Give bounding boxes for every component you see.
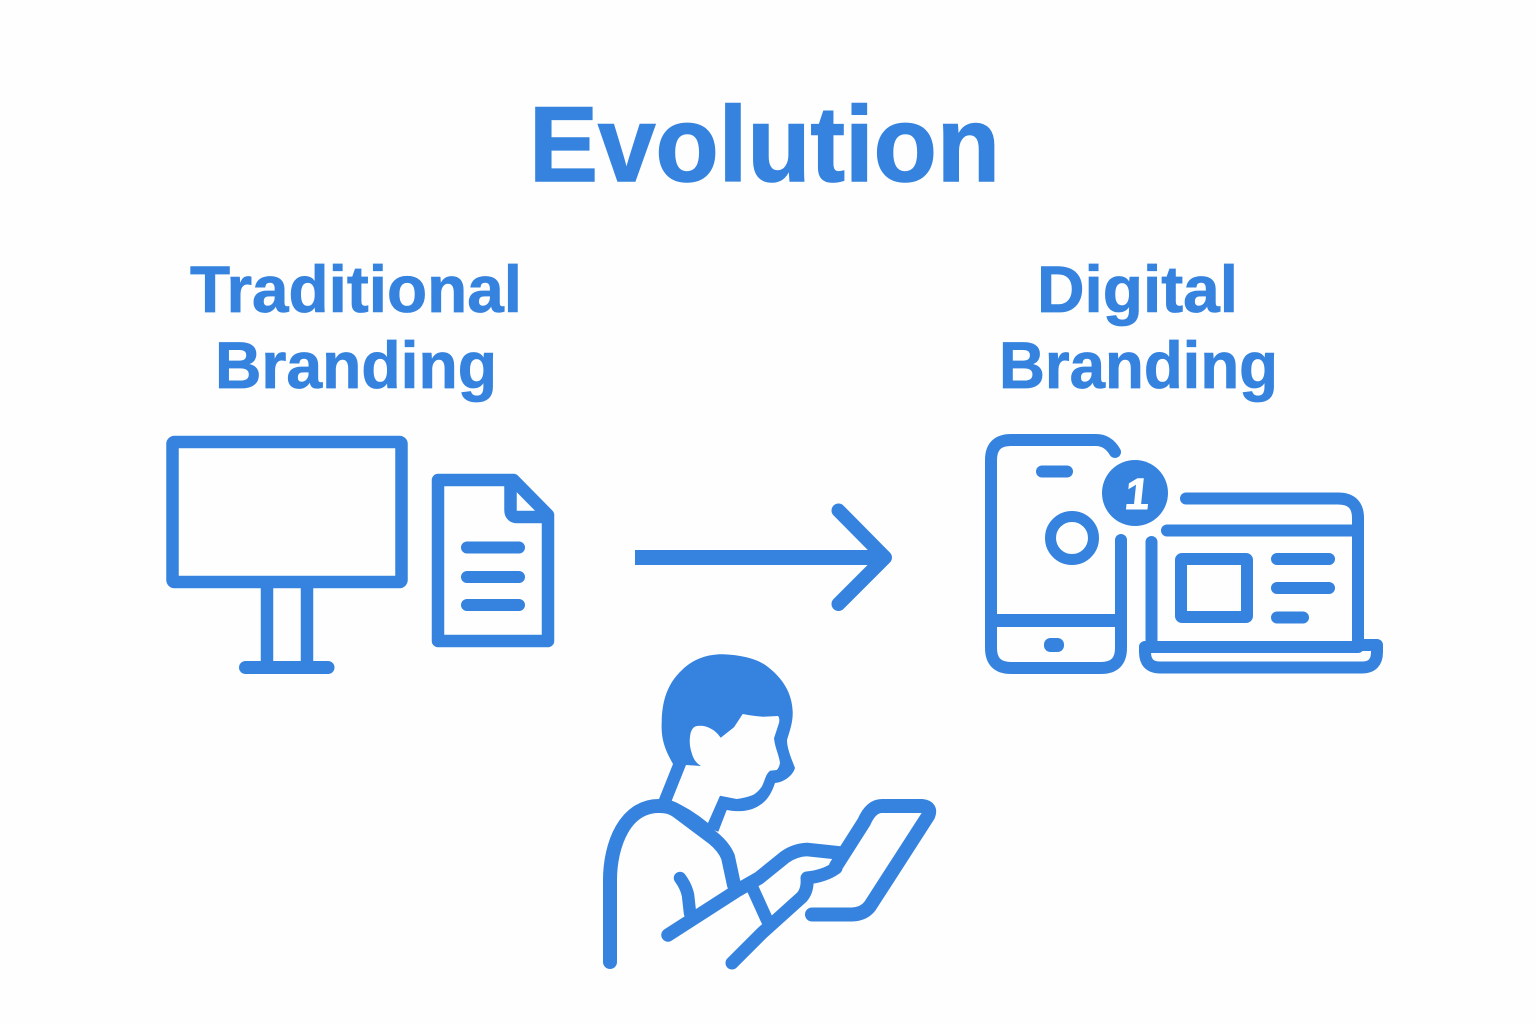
arrow <box>635 510 885 604</box>
sleeve <box>752 887 767 920</box>
icon: laptop <box>1145 498 1377 668</box>
heading: digital branding: Digital <box>1037 252 1238 326</box>
icon: monitor <box>172 442 402 668</box>
head and neck <box>659 654 795 832</box>
notification badge: 1 <box>1123 470 1152 519</box>
hand and fingers <box>732 868 836 963</box>
heading: traditional branding: Branding <box>215 328 497 402</box>
heading: digital branding: Branding <box>999 328 1278 402</box>
heading: digital branding <box>999 252 1278 402</box>
icon: person using tablet <box>610 654 929 963</box>
icon: document <box>438 480 548 641</box>
inner arm <box>668 850 840 935</box>
tablet outline <box>812 806 929 914</box>
heading: traditional branding <box>190 252 522 402</box>
heading: traditional branding: Traditional <box>190 252 522 326</box>
shoulder and back <box>610 806 734 962</box>
notification badge <box>1102 460 1168 526</box>
face cutout <box>672 714 780 823</box>
title: Evolution <box>529 84 1000 204</box>
icon: smartphone with notification badge <box>991 440 1168 668</box>
elbow crease <box>680 878 690 913</box>
